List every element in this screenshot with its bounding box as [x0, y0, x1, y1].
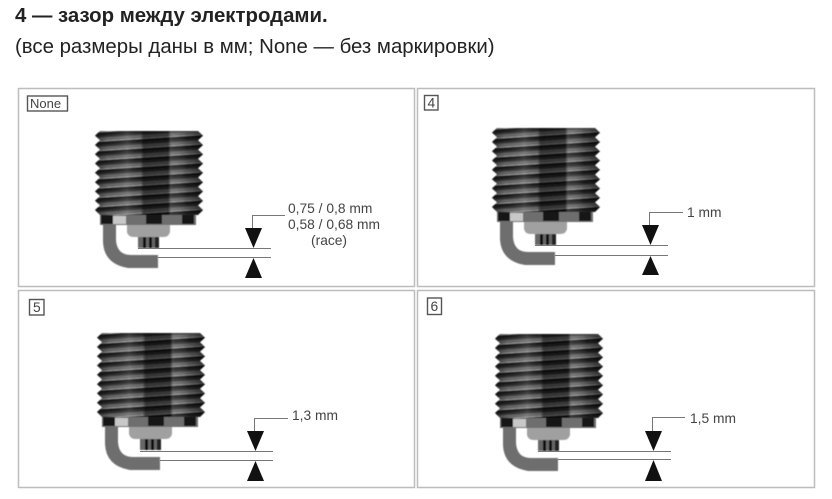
icon: spark plug	[95, 131, 203, 268]
label: 4	[424, 96, 438, 110]
icon: spark plug	[495, 334, 603, 471]
gap dimension	[140, 418, 288, 481]
panel: 5	[18, 290, 414, 488]
subtitle note: (все размеры даны в мм; None — без маркировки)	[15, 36, 495, 58]
title: 4 — зазор между электродами.	[15, 5, 328, 27]
gap value: 1,5 mm	[690, 411, 736, 426]
label: 5: 5	[33, 300, 41, 315]
gap value: 1,3 mm	[292, 408, 338, 423]
label: 6: 6	[430, 299, 438, 314]
gap dimension	[538, 418, 685, 481]
label: 4: 4	[428, 96, 436, 110]
gap value: 1 mm	[687, 205, 722, 220]
gap dimension	[138, 216, 285, 278]
gap values: 0,75 / 0,8 mm	[288, 201, 372, 216]
gap values: 0,58 / 0,68 mm	[288, 217, 380, 232]
panel: None	[18, 88, 414, 286]
panel: 4	[418, 88, 814, 286]
icon: spark plug	[492, 128, 600, 265]
gap values: (race)	[311, 233, 347, 248]
gap values	[288, 201, 380, 248]
label: None: None	[30, 96, 61, 111]
gap dimension	[535, 212, 683, 275]
label: 6	[428, 298, 442, 314]
label: 5	[30, 300, 44, 315]
icon: spark plug	[97, 333, 205, 470]
panel: 6	[418, 290, 814, 488]
